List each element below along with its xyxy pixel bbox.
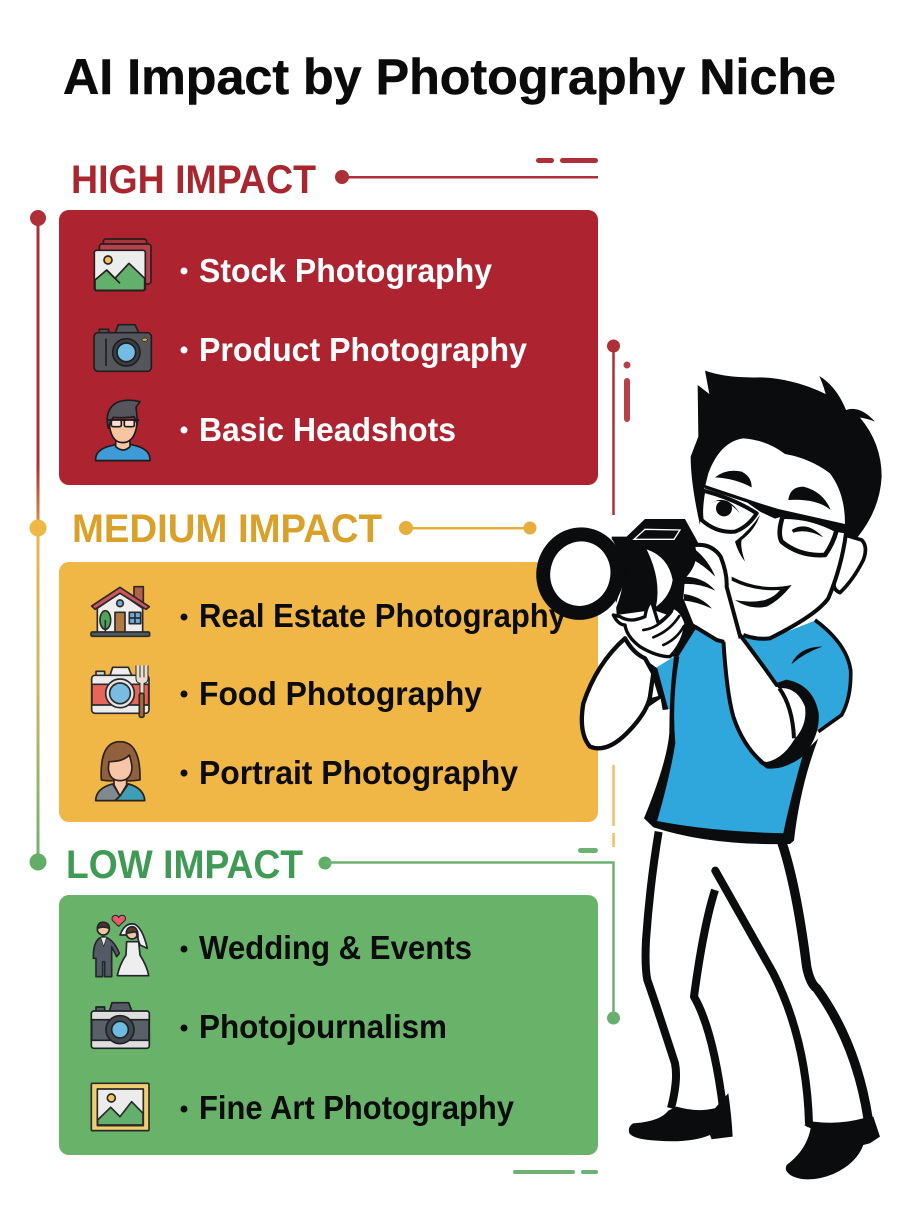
panel: low impact xyxy=(59,895,598,1155)
right shoe xyxy=(786,1117,880,1179)
icon: product camera xyxy=(94,325,151,371)
text: wedding and events: Wedding & Events xyxy=(199,929,472,966)
text: stock photography: Stock Photography xyxy=(199,252,493,289)
panel: medium impact xyxy=(59,562,598,822)
ear xyxy=(834,535,865,593)
blue t-shirt xyxy=(648,620,851,840)
lower hand xyxy=(613,602,686,657)
lens crescent xyxy=(647,549,673,607)
bottom decorative dashes xyxy=(513,1170,598,1174)
title: AI Impact by Photography Niche xyxy=(63,49,836,105)
heading: medium impact: MEDIUM IMPACT xyxy=(72,507,382,551)
connector: medium impact xyxy=(399,521,536,535)
illustration: photographer xyxy=(536,371,882,1179)
head xyxy=(691,371,882,639)
camera body xyxy=(612,519,702,625)
connector: right side red and yellow xyxy=(607,340,630,847)
icon: woman portrait xyxy=(96,742,145,801)
open eye xyxy=(708,500,740,516)
nose xyxy=(735,515,760,562)
left arm xyxy=(582,638,653,748)
icon: stock photo stack xyxy=(94,239,151,291)
icon: man headshot xyxy=(96,400,150,461)
smile xyxy=(732,577,792,607)
icon: food camera xyxy=(92,665,149,717)
face xyxy=(700,438,845,639)
legs xyxy=(629,830,880,1179)
text: photojournalism: Photojournalism xyxy=(199,1008,447,1045)
connector: low impact xyxy=(318,848,620,1024)
icon: fine art frame xyxy=(91,1083,149,1131)
text: product photography: Product Photography xyxy=(199,331,528,368)
left timeline connector xyxy=(30,210,46,870)
left shoe xyxy=(629,1093,733,1141)
text: basic headshots: Basic Headshots xyxy=(199,411,456,448)
upper hand xyxy=(683,545,741,642)
icon: photojournalism camera xyxy=(91,1003,149,1048)
camera xyxy=(536,519,741,657)
text: real estate photography: Real Estate Photography xyxy=(199,597,567,634)
icon: house xyxy=(91,587,150,636)
winking eye xyxy=(792,526,823,537)
heading: low impact: LOW IMPACT xyxy=(66,843,303,887)
text: fine art photography: Fine Art Photography xyxy=(199,1089,515,1126)
right arm xyxy=(723,635,818,769)
torso and arms xyxy=(582,617,851,844)
lens ring xyxy=(536,527,625,620)
heading: high impact: HIGH IMPACT xyxy=(71,158,316,202)
icon: wedding couple xyxy=(93,915,149,977)
glasses xyxy=(701,485,845,555)
text: food photography: Food Photography xyxy=(199,675,483,712)
panel: high impact xyxy=(59,210,598,485)
hair xyxy=(691,371,882,538)
eyebrows xyxy=(715,471,831,510)
text: portrait photography: Portrait Photography xyxy=(199,754,519,791)
connector: high impact xyxy=(335,158,598,184)
